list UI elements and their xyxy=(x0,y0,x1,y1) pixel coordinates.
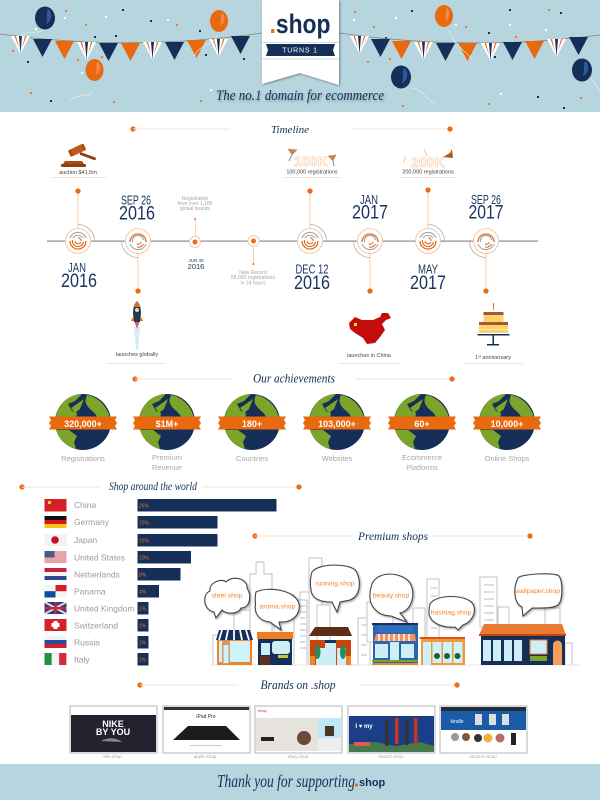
row: Panama: 4% xyxy=(139,590,147,596)
thumbnail: ebay.shop: ebay xyxy=(258,708,267,713)
thumbnail: swatch.shop: swatch.shop xyxy=(378,754,404,759)
bubble: beauty.shop xyxy=(370,574,413,622)
axis xyxy=(47,240,538,242)
thumbnail: ebay.shop xyxy=(255,706,342,759)
node: Jun 30 2016: from over 1,180 xyxy=(177,201,213,207)
bar chart: countries xyxy=(44,499,276,666)
icon: gavel xyxy=(61,143,96,167)
thumbnail: nike.shop: nike.shop xyxy=(102,754,122,759)
node: new record: New Record xyxy=(239,270,267,276)
bunting right xyxy=(339,33,600,61)
heading: timeline: Timeline xyxy=(271,124,309,136)
row: United Kingdom xyxy=(44,602,148,614)
thumbnail: amazon.shop: amazon.shop xyxy=(469,754,497,759)
bubble: steel.shop: steel.shop xyxy=(212,592,243,600)
node: Jan 2017: JAN xyxy=(360,192,378,207)
node: Jan 2016 xyxy=(61,188,97,292)
heading: shop around the world: Shop around the world xyxy=(109,479,198,493)
node: May 2017 xyxy=(410,187,446,294)
node: May 2017: 2017 xyxy=(410,273,446,294)
footer xyxy=(0,764,600,800)
label: launches in China xyxy=(339,353,400,364)
node: new record xyxy=(231,236,275,286)
stat: registrations: Registrations xyxy=(61,454,105,463)
row: Germany: 15% xyxy=(139,520,150,526)
node: Jun 30 2016 xyxy=(177,196,213,271)
confetti xyxy=(12,9,582,109)
row: Japan: Japan xyxy=(74,535,97,545)
icon: 100K: 100K xyxy=(294,154,328,169)
icon: rocket xyxy=(131,301,143,350)
tagline: The no.1 domain for ecommerce xyxy=(216,88,384,104)
row: Netherlands: 8% xyxy=(139,572,147,578)
label: launches in China: launches in China xyxy=(347,353,392,359)
heading: premium shops: Premium shops xyxy=(357,529,428,543)
icon: cake xyxy=(478,303,510,346)
shop: hashtag xyxy=(420,637,465,665)
heading: our achievements: Our achievements xyxy=(253,370,335,386)
shop: running xyxy=(309,627,352,665)
node: Sep 26 2017: SEP 26 xyxy=(471,192,501,207)
row: Japan xyxy=(44,534,218,546)
row: Russia: Russia xyxy=(74,638,100,648)
bubble: wallpaper.shop: wallpaper.shop xyxy=(514,588,560,595)
shop: steel xyxy=(216,630,253,665)
thumbnail: nike.shop xyxy=(70,706,157,759)
node: Sep 26 2016 xyxy=(119,192,155,294)
heading: shop around the world xyxy=(19,479,302,493)
stat: websites: 103,000+ xyxy=(318,419,356,429)
stat: registrations: 320,000+ xyxy=(64,419,102,429)
icon: 100K xyxy=(288,149,336,169)
node: Sep 26 2017 xyxy=(468,192,504,294)
row: Switzerland: Switzerland xyxy=(74,620,118,630)
stat: online shops: Online Shops xyxy=(484,454,530,463)
label: auction: auction $41.5m xyxy=(59,170,97,176)
node: Jun 30 2016: Registration xyxy=(182,196,209,202)
stat: websites: Websites xyxy=(322,454,353,463)
label: 1st anniversary: st xyxy=(478,354,481,358)
node: Jan 2016: JAN xyxy=(68,260,86,275)
label: 200,000 registrations xyxy=(399,170,456,178)
stat: premium revenue: Revenue xyxy=(152,463,182,472)
row: United States xyxy=(44,551,191,564)
node: Dec 12 2016: DEC 12 xyxy=(296,262,328,276)
row: China xyxy=(44,499,276,512)
premium shops skyline xyxy=(205,558,581,666)
label: 200,000 registrations: 200,000 registrations xyxy=(402,170,454,176)
node: Sep 26 2016: SEP 26 xyxy=(121,192,151,208)
row: Italy: Italy xyxy=(74,654,90,664)
bubble: aroma.shop: aroma.shop xyxy=(260,604,296,610)
thumbnail: nike.shop: NIKE xyxy=(102,719,124,729)
bubble: beauty.shop: beauty.shop xyxy=(373,592,409,600)
row: Switzerland xyxy=(44,619,148,632)
node: May 2017: MAY xyxy=(418,262,438,276)
stat: premium revenue xyxy=(133,394,201,472)
row: Russia: 2% xyxy=(139,640,147,646)
shop: wallpaper xyxy=(479,624,566,665)
bubble: running.shop: running.shop xyxy=(315,580,355,588)
bubble: wallpaper.shop xyxy=(514,574,562,616)
label: auction xyxy=(52,170,106,178)
node: Jan 2017 xyxy=(352,192,388,294)
logo: .shop xyxy=(270,9,330,39)
header banner xyxy=(0,0,600,112)
thumbnail: apple.shop: apple.shop xyxy=(194,754,217,759)
label: 1st anniversary: 1 xyxy=(475,355,478,361)
node: Jun 30 2016: 2016 xyxy=(188,262,204,271)
stat: countries xyxy=(218,394,286,463)
row: United Kingdom: United Kingdom xyxy=(74,604,134,614)
brand thumbnails xyxy=(70,706,527,759)
bubble: hashtag.shop: hashtag.shop xyxy=(431,610,472,616)
row: Netherlands xyxy=(44,568,180,580)
thumbnail: ebay.shop: ebay.shop xyxy=(288,754,309,759)
row: China: China xyxy=(74,500,96,510)
node: Dec 12 2016 xyxy=(294,188,330,294)
row: China: 26% xyxy=(139,504,150,510)
label: 100,000 registrations xyxy=(283,170,340,178)
icon: 200K: 200K xyxy=(411,155,445,170)
node: new record: in 24 hours xyxy=(241,280,266,286)
bunting left xyxy=(0,33,262,61)
row: Switzerland: 2% xyxy=(139,624,147,630)
stat: online shops xyxy=(473,394,541,463)
bubble: steel.shop xyxy=(205,578,250,618)
thumbnail: apple.shop xyxy=(163,706,250,759)
buildings xyxy=(213,558,572,665)
bubble: running.shop xyxy=(310,565,359,612)
node: Sep 26 2016: 2016 xyxy=(119,204,155,224)
row: United States: 10% xyxy=(139,556,150,562)
row: Russia xyxy=(44,636,148,648)
stat: premium revenue: Premium xyxy=(152,453,182,462)
row: Germany: Germany xyxy=(74,517,110,527)
stat: ecommerce platforms xyxy=(388,394,456,472)
row: Germany xyxy=(44,516,218,528)
stat: registrations xyxy=(49,394,117,463)
row: Panama xyxy=(44,585,159,598)
heading: timeline xyxy=(130,124,453,136)
stat: premium revenue: $1M+ xyxy=(156,419,178,429)
row: Italy xyxy=(44,653,148,666)
shop: aroma xyxy=(257,632,293,665)
node: Jun 30 2016: JUN 30 xyxy=(188,258,204,263)
heading: brands on .shop: Brands on .shop xyxy=(260,677,336,692)
icon: China map xyxy=(349,313,391,344)
timeline xyxy=(47,143,538,364)
row: Panama: Panama xyxy=(74,586,106,596)
node: Jan 2017: 2017 xyxy=(352,202,388,224)
bubble: hashtag.shop xyxy=(429,596,474,630)
heading: premium shops xyxy=(252,529,533,543)
node: Sep 26 2017: 2017 xyxy=(468,202,504,224)
thumbnail: nike.shop: BY YOU xyxy=(96,727,130,737)
thank you message: shop xyxy=(359,777,386,789)
thumbnail: amazon.shop: kindle xyxy=(450,719,464,725)
node: Dec 12 2016: 2016 xyxy=(294,273,330,294)
stat: ecommerce platforms: Platforms xyxy=(406,463,438,472)
icon: 200K xyxy=(403,149,453,170)
heading: our achievements xyxy=(132,370,455,386)
row: Italy: 2% xyxy=(139,658,147,664)
stat: websites xyxy=(303,394,371,463)
stat: countries: 180+ xyxy=(242,419,262,429)
stat: ecommerce platforms: 60+ xyxy=(414,419,430,429)
stat: ecommerce platforms: Ecommerce xyxy=(402,453,442,462)
label: 100,000 registrations: 100,000 registrations xyxy=(286,170,338,176)
row: Netherlands: Netherlands xyxy=(74,570,120,580)
label: 1st anniversary xyxy=(463,354,523,364)
node: Jan 2016: 2016 xyxy=(61,271,97,292)
node: new record: 56,000 registrations xyxy=(231,275,275,281)
node: Jun 30 2016: global brands xyxy=(180,206,211,212)
stat: online shops: 10,000+ xyxy=(491,419,523,429)
row: United States: United States xyxy=(74,552,125,562)
row: United Kingdom: 2% xyxy=(139,606,147,612)
thumbnail: swatch.shop: I ♥ my xyxy=(355,724,373,730)
thumbnail: amazon.shop xyxy=(440,706,527,759)
label: launches globally xyxy=(108,352,166,364)
thumbnail: apple.shop: iPad Pro xyxy=(196,714,216,720)
label: 1st anniversary: anniversary xyxy=(481,355,511,361)
shop: beauty xyxy=(372,623,418,665)
bubble: aroma.shop xyxy=(255,589,299,630)
heading: brands on .shop xyxy=(137,677,460,692)
label: launches globally: launches globally xyxy=(116,352,158,358)
thumbnail: swatch.shop xyxy=(348,706,435,759)
thank you message: Thank you for supporting xyxy=(217,771,355,791)
connector lines xyxy=(78,190,486,291)
turns 1 banner: TURNS 1 xyxy=(282,48,318,54)
ribbon with logo xyxy=(262,0,339,85)
balloons xyxy=(20,5,600,105)
achievements xyxy=(49,394,541,472)
stat: countries: Countries xyxy=(236,454,268,463)
row: Japan: 15% xyxy=(139,538,150,544)
